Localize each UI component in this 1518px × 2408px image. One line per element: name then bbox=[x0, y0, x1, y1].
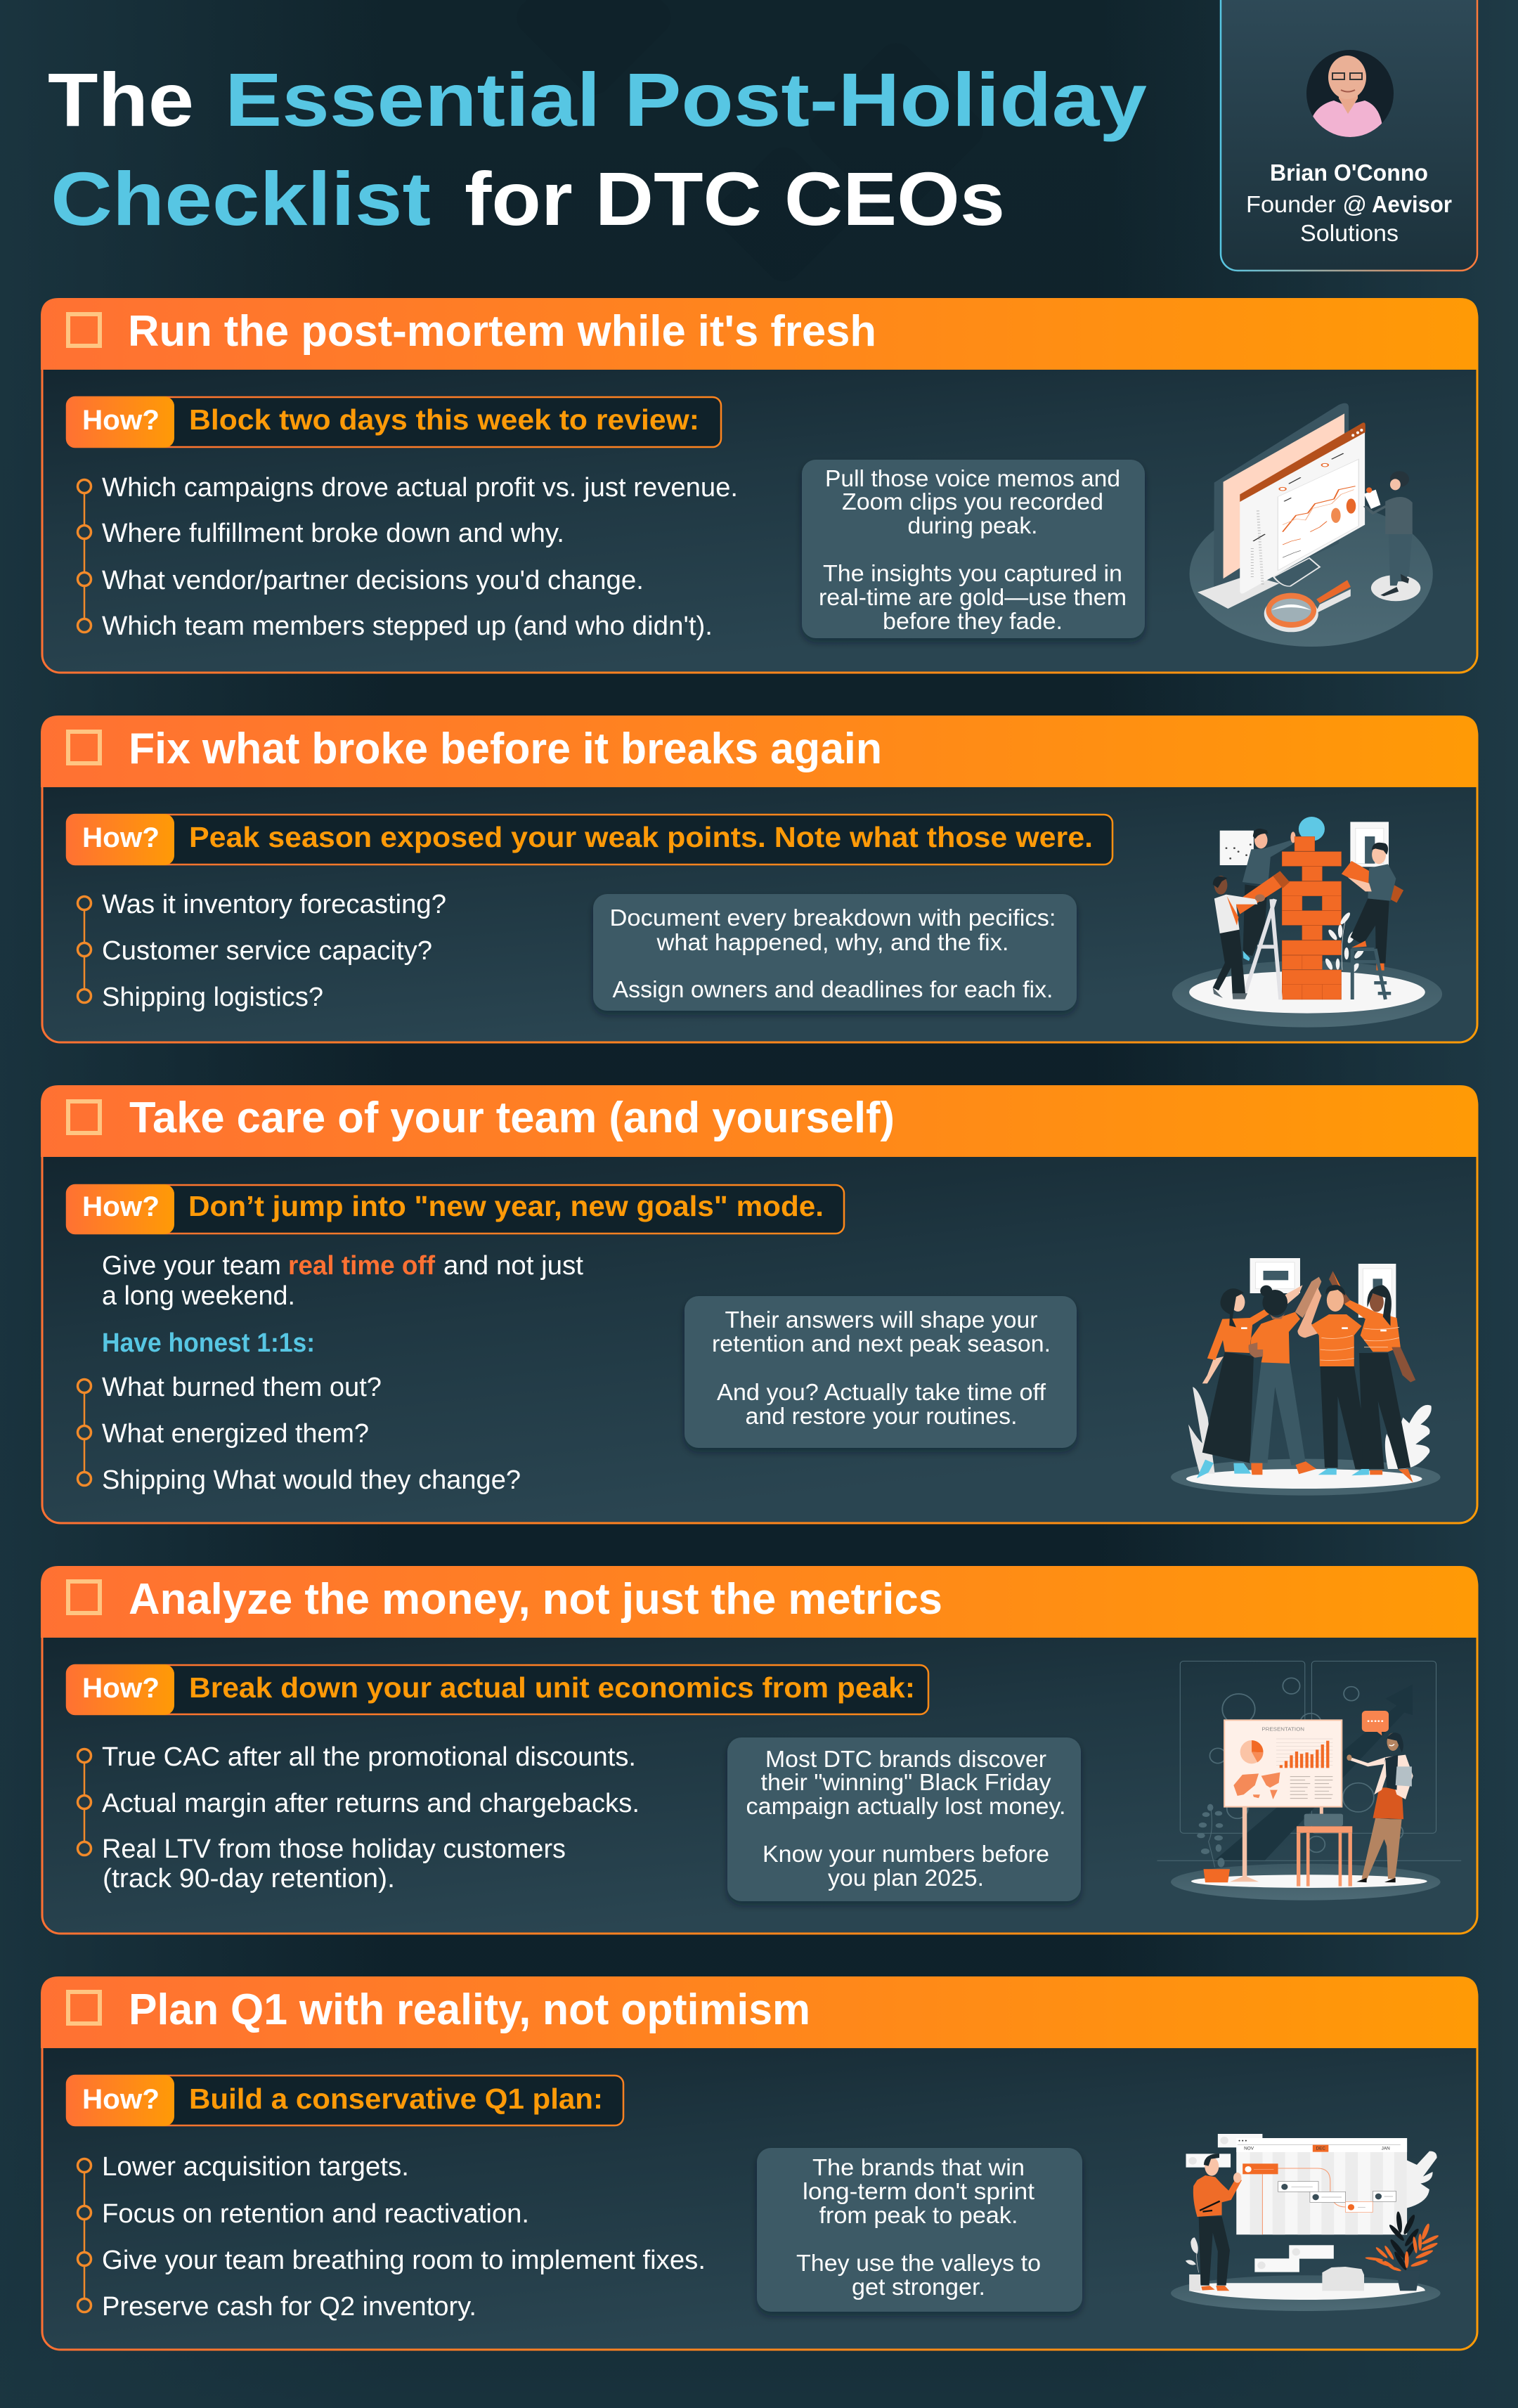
author name: Brian O'Conno bbox=[1270, 160, 1428, 186]
illustration: team high five bbox=[1171, 1258, 1441, 1496]
title: Checklist bbox=[51, 156, 431, 241]
callout: Their answers will shape your bbox=[725, 1307, 1037, 1333]
checklist: What vendor/partner decisions you'd change. bbox=[102, 566, 644, 595]
callout: what happened, why, and the fix. bbox=[656, 930, 1009, 956]
checklist: Preserve cash for Q2 inventory. bbox=[102, 2292, 476, 2322]
checklist: What burned them out? bbox=[102, 1373, 382, 1402]
callout: Document every breakdown with pecifics: bbox=[610, 905, 1056, 931]
callout: Zoom clips you recorded bbox=[842, 489, 1103, 515]
callout: The insights you captured in bbox=[823, 561, 1122, 587]
panel: fix what broke bbox=[41, 716, 1478, 1042]
heading: Run the post-mortem while it's fresh bbox=[128, 307, 876, 356]
how row: How? bbox=[82, 1191, 160, 1222]
title: Essential Post-Holiday bbox=[225, 57, 1147, 142]
panel body bbox=[42, 1087, 1477, 1523]
checklist: What energized them? bbox=[102, 1419, 369, 1449]
checklist: Which team members stepped up (and who didn't). bbox=[102, 611, 713, 641]
callout bbox=[593, 894, 1077, 1011]
callout: They use the valleys to bbox=[796, 2251, 1041, 2277]
callout: long-term don't sprint bbox=[803, 2179, 1035, 2205]
checklist: Give your team breathing room to implement fixes. bbox=[102, 2246, 706, 2275]
checkbox bbox=[68, 1101, 100, 1133]
callout: Know your numbers before bbox=[763, 1841, 1049, 1868]
callout: their "winning" Black Friday bbox=[760, 1770, 1051, 1796]
panel body bbox=[42, 299, 1477, 673]
checklist: Was it inventory forecasting? bbox=[102, 890, 446, 919]
how row: Break down your actual unit economics from peak: bbox=[189, 1671, 915, 1704]
how row bbox=[66, 1184, 844, 1234]
heading: Analyze the money, not just the metrics bbox=[129, 1575, 942, 1624]
callout bbox=[727, 1737, 1081, 1901]
checklist bbox=[77, 2152, 706, 2322]
illustration: dashboard review bbox=[1190, 403, 1433, 647]
checklist: (track 90-day retention). bbox=[103, 1864, 395, 1894]
how row bbox=[66, 2075, 623, 2126]
callout bbox=[757, 2148, 1082, 2312]
checklist: Shipping What would they change? bbox=[102, 1465, 521, 1495]
title: The bbox=[48, 57, 194, 142]
panel body bbox=[42, 717, 1477, 1042]
illustration: team building block tower bbox=[1172, 817, 1442, 1028]
heading: Take care of your team (and yourself) bbox=[129, 1094, 895, 1142]
callout: campaign actually lost money. bbox=[746, 1794, 1065, 1820]
intro text: a long weekend. bbox=[102, 1281, 295, 1311]
checklist bbox=[77, 1373, 521, 1495]
checklist bbox=[77, 890, 446, 1012]
how row: How? bbox=[82, 822, 160, 853]
panel: plan Q1 bbox=[41, 1976, 1478, 2350]
checklist: Customer service capacity? bbox=[102, 936, 432, 966]
how row: How? bbox=[82, 2084, 160, 2115]
callout: real-time are gold—use them bbox=[819, 585, 1127, 611]
checkbox bbox=[68, 732, 100, 763]
intro text: Give your team bbox=[102, 1251, 281, 1281]
author role: Solutions bbox=[1300, 220, 1399, 246]
checklist: Shipping logistics? bbox=[102, 983, 323, 1012]
panel header bbox=[41, 298, 1478, 370]
panel body bbox=[42, 1567, 1477, 1934]
panel header bbox=[41, 1566, 1478, 1638]
intro text bbox=[102, 1251, 583, 1311]
how row: Peak season exposed your weak points. Note what those were. bbox=[189, 821, 1093, 853]
author card bbox=[1221, 0, 1477, 271]
author role: Founder @ bbox=[1246, 191, 1367, 217]
panel body bbox=[42, 1978, 1477, 2350]
panel: run the post-mortem bbox=[41, 298, 1478, 673]
callout: you plan 2025. bbox=[828, 1865, 984, 1891]
checkbox bbox=[68, 1581, 100, 1613]
callout: get stronger. bbox=[852, 2274, 985, 2300]
intro text: real time off bbox=[288, 1251, 435, 1281]
title: for DTC CEOs bbox=[465, 156, 1005, 241]
heading: Fix what broke before it breaks again bbox=[129, 725, 882, 773]
panel header bbox=[41, 1976, 1478, 2048]
checklist bbox=[77, 1742, 640, 1894]
illustration: presentation board bbox=[1157, 1661, 1461, 1901]
author role: Aevisor bbox=[1372, 191, 1452, 217]
how row bbox=[66, 396, 721, 448]
panel header bbox=[41, 1085, 1478, 1157]
panel: analyze the money bbox=[41, 1566, 1478, 1934]
callout: and restore your routines. bbox=[745, 1404, 1018, 1430]
callout: during peak. bbox=[908, 513, 1037, 539]
how row: Don’t jump into "new year, new goals" mode. bbox=[188, 1190, 824, 1222]
author role bbox=[1246, 191, 1452, 246]
callout: retention and next peak season. bbox=[712, 1331, 1051, 1357]
how row bbox=[66, 814, 1112, 865]
how row bbox=[66, 1664, 928, 1715]
how row: How? bbox=[82, 405, 160, 436]
callout: Most DTC brands discover bbox=[765, 1747, 1046, 1773]
checklist: Where fulfillment broke down and why. bbox=[102, 519, 564, 548]
callout: Pull those voice memos and bbox=[825, 466, 1120, 492]
checklist: Which campaigns drove actual profit vs. just revenue. bbox=[102, 473, 738, 503]
card background bbox=[1221, 0, 1477, 271]
callout bbox=[802, 460, 1145, 638]
panel: take care of your team bbox=[41, 1085, 1478, 1523]
callout: And you? Actually take time off bbox=[717, 1380, 1046, 1406]
checklist bbox=[77, 473, 738, 641]
panel header bbox=[41, 716, 1478, 787]
how row: How? bbox=[82, 1673, 160, 1704]
checkbox bbox=[68, 1992, 100, 2024]
checkbox bbox=[68, 314, 100, 346]
title bbox=[48, 57, 1147, 241]
callout bbox=[685, 1296, 1077, 1448]
illustration: project timeline: DEC bbox=[1316, 2147, 1326, 2151]
how row: Block two days this week to review: bbox=[189, 403, 699, 436]
illustration: presentation board: PRESENTATION bbox=[1261, 1726, 1304, 1733]
checklist: Focus on retention and reactivation. bbox=[102, 2199, 529, 2229]
author portrait bbox=[1306, 50, 1394, 137]
illustration: project timeline: JAN bbox=[1382, 2147, 1390, 2151]
callout: The brands that win bbox=[812, 2155, 1025, 2181]
subheading: honest 1:1s: Have honest 1:1s: bbox=[102, 1328, 315, 1358]
illustration: project timeline: NOV bbox=[1244, 2147, 1254, 2151]
illustration: project timeline bbox=[1171, 2134, 1441, 2311]
how row: Build a conservative Q1 plan: bbox=[189, 2083, 603, 2115]
intro text: and not just bbox=[443, 1251, 583, 1281]
checklist: True CAC after all the promotional discounts. bbox=[102, 1742, 636, 1772]
callout: Assign owners and deadlines for each fix. bbox=[613, 977, 1053, 1003]
checklist: Actual margin after returns and chargebacks. bbox=[102, 1789, 640, 1818]
checklist: Lower acquisition targets. bbox=[102, 2152, 409, 2182]
callout: from peak to peak. bbox=[819, 2203, 1018, 2229]
checklist: Real LTV from those holiday customers bbox=[102, 1834, 566, 1864]
callout: before they fade. bbox=[883, 609, 1063, 635]
heading: Plan Q1 with reality, not optimism bbox=[129, 1986, 810, 2034]
